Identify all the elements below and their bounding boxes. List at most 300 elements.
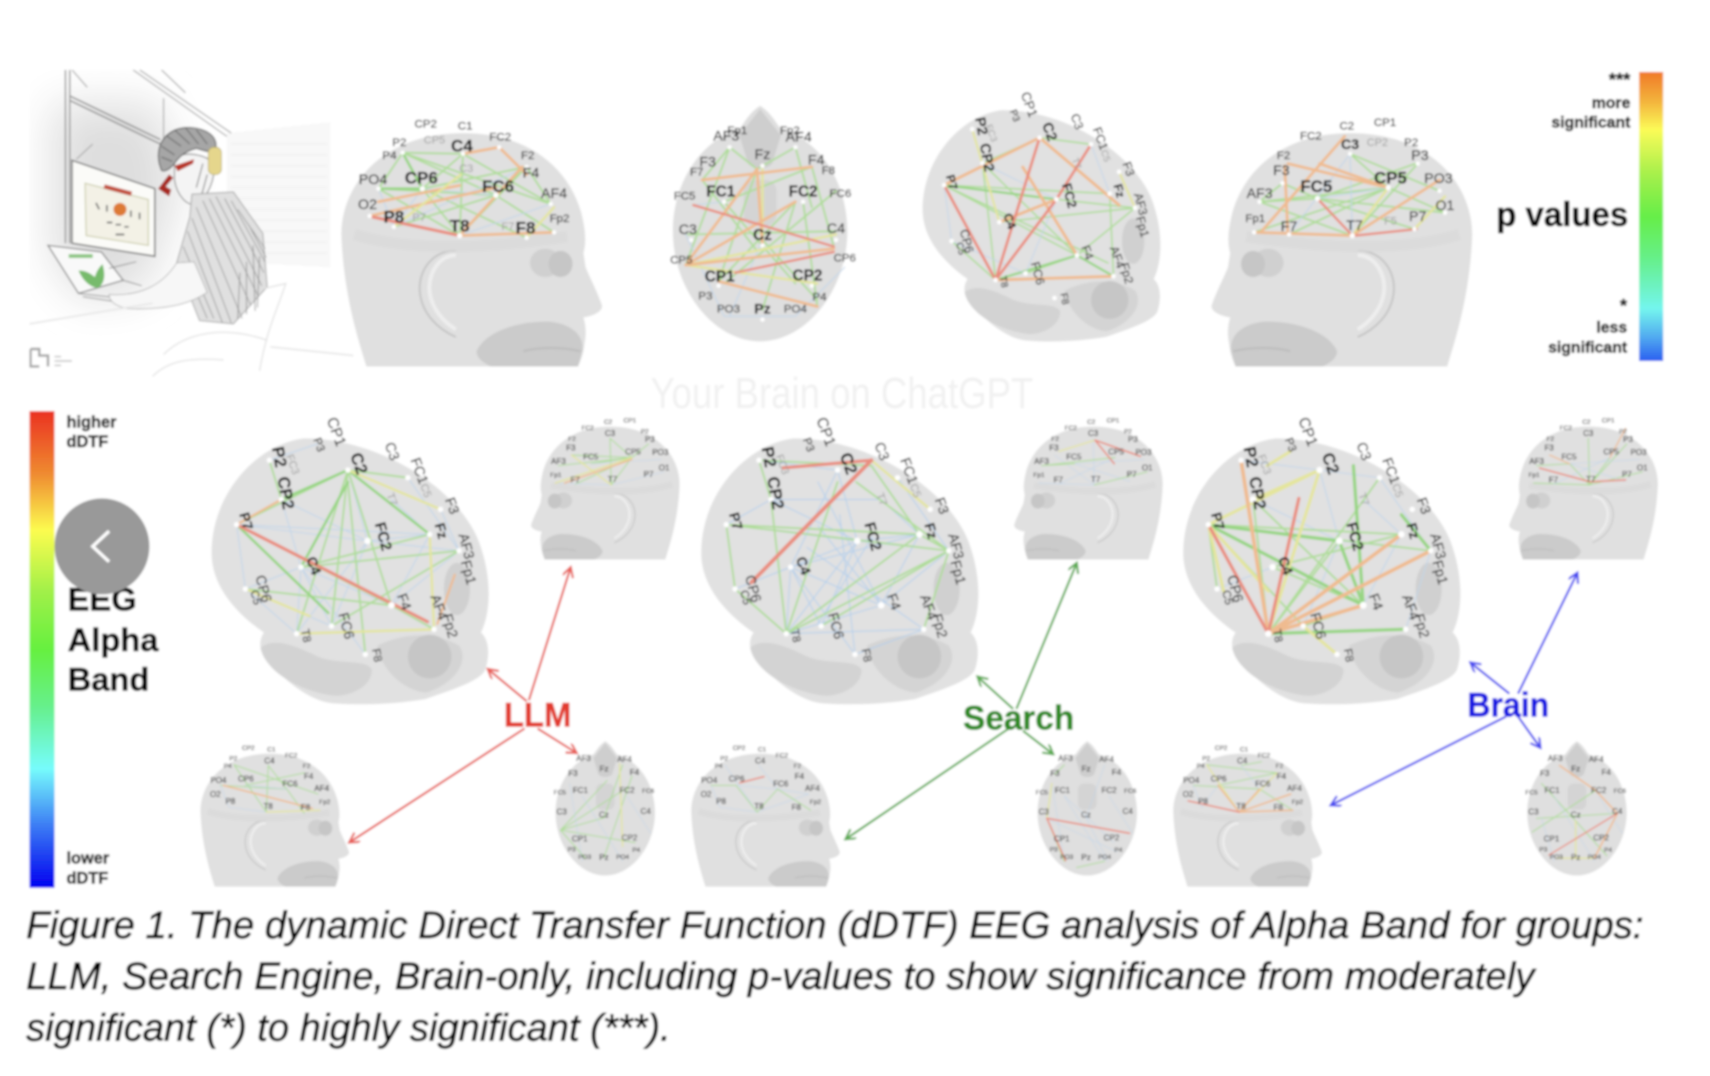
electrode labels: FC6 — [335, 611, 357, 641]
electrode labels: CP5 — [1108, 447, 1124, 456]
electrode labels — [1245, 117, 1455, 235]
p values legend: *** — [1609, 69, 1631, 90]
Search group: small side view left — [1014, 417, 1163, 560]
electrode labels: FC2 — [581, 425, 594, 432]
electrode labels: F3 — [1049, 444, 1059, 453]
Brain group: small side view left — [1509, 417, 1658, 560]
electrode labels: C5 — [953, 241, 967, 257]
electrode labels: CP5 — [670, 255, 692, 267]
electrode labels: FC6 — [1255, 780, 1271, 789]
electrode labels: FC1 — [1055, 786, 1071, 795]
electrode labels: T8 — [1270, 628, 1284, 643]
electrode labels: AF3 — [1058, 754, 1073, 763]
figure caption: Figure 1. The dynamic Direct Transfer Function (dDTF) EEG analysis of Alpha Band for groups: — [26, 904, 1643, 947]
electrode labels: F4 — [630, 768, 640, 777]
electrode labels: T8 — [450, 216, 470, 235]
Search group: small side view right — [691, 745, 840, 887]
figure caption: significant (*) to highly significant (***). — [26, 1006, 671, 1049]
electrode labels: F2 — [1276, 763, 1284, 770]
dDTF legend colour bar: Band — [68, 660, 149, 697]
electrode labels: CP1 — [812, 415, 839, 449]
electrode labels: PO3 — [1424, 171, 1453, 187]
node dots — [942, 127, 1137, 300]
electrode labels: Fz — [431, 521, 450, 541]
electrode labels: FC2 — [1101, 786, 1117, 795]
electrode labels: CP6 — [741, 574, 764, 604]
node dots — [1252, 152, 1447, 238]
electrode labels: F2 — [794, 763, 802, 770]
electrode labels: C4 — [451, 137, 473, 156]
electrode labels: CP1 — [1544, 834, 1560, 843]
electrode labels: FC5 — [1525, 789, 1538, 796]
electrode labels: AF3 — [551, 457, 566, 466]
electrode labels: C1 — [758, 746, 767, 753]
electrode labels: C2 — [1087, 419, 1096, 426]
electrode labels: CP2 — [976, 142, 997, 173]
electrode labels: Fz — [1571, 765, 1580, 774]
electrode labels: FC2 — [489, 131, 511, 143]
electrode labels: PO3 — [578, 854, 592, 861]
watermark title: Your Brain on ChatGPT — [651, 370, 1033, 418]
electrode labels: FC6 — [1028, 260, 1047, 287]
electrode labels: F2 — [1051, 436, 1059, 443]
electrode labels: C5 — [1389, 482, 1405, 499]
electrode labels: PO4 — [359, 172, 387, 188]
electrode labels: C4 — [640, 807, 651, 816]
electrode labels: FC1 — [1090, 125, 1111, 152]
electrode labels: Fz — [1403, 521, 1422, 541]
Brain group: small side view right — [1173, 745, 1322, 887]
electrode labels: T8 — [298, 628, 312, 643]
electrode labels: Pz — [1571, 853, 1580, 862]
p values legend: significant — [1548, 339, 1628, 356]
electrode labels: T8 — [263, 802, 273, 811]
electrode labels: CP2 — [733, 745, 746, 752]
electrode labels — [235, 415, 479, 663]
LLM group: large tilted brain map — [212, 415, 489, 704]
electrode labels: C3 — [1341, 137, 1359, 153]
electrode labels — [725, 415, 968, 663]
electrode labels: P8 — [383, 208, 404, 227]
electrode labels: F2 — [1277, 150, 1290, 162]
electrode labels: CP2 — [1104, 834, 1120, 843]
electrode labels: PO4 — [1183, 776, 1200, 785]
electrode labels: P7 — [725, 511, 745, 532]
electrode labels: FC6 — [824, 611, 847, 641]
electrode labels: C2 — [346, 450, 371, 477]
Brain group: small top view — [1525, 741, 1627, 876]
electrode labels: O2 — [210, 790, 221, 799]
electrode labels: AF3 — [713, 128, 739, 144]
electrode labels: F8 — [516, 218, 535, 237]
electrode labels: P7 — [1127, 470, 1137, 479]
electrode labels: Fp2 — [810, 799, 822, 806]
electrode labels: P3 — [568, 847, 576, 854]
electrode labels: F3 — [1273, 163, 1290, 179]
electrode labels: Fp1 — [1529, 472, 1540, 479]
electrode labels — [670, 125, 856, 318]
electrode labels: CP6 — [1223, 574, 1246, 604]
electrode labels: P8 — [225, 797, 236, 806]
electrode labels: Fz — [1082, 765, 1091, 774]
electrode labels: CP6 — [729, 775, 745, 784]
electrode labels: AF3 — [455, 532, 477, 561]
electrode labels: P3 — [1411, 148, 1429, 164]
electrode labels: CP2 — [1215, 745, 1228, 752]
electrode labels: Fp1 — [457, 559, 479, 587]
electrode labels: F7 — [1281, 219, 1297, 235]
electrode labels: FC2 — [1560, 425, 1572, 432]
electrode labels: CP6 — [1211, 775, 1227, 784]
dDTF legend colour bar: dDTF — [67, 869, 108, 887]
electrode labels — [701, 745, 822, 812]
electrode labels: O1 — [659, 464, 670, 473]
electrode labels: P3 — [310, 436, 326, 454]
electrode labels: AF4 — [426, 593, 450, 623]
electrode labels: F7 — [502, 221, 514, 233]
electrode labels: F8 — [1341, 648, 1355, 663]
electrode labels — [554, 754, 655, 862]
electrode labels: C5 — [248, 589, 263, 606]
electrode labels: FC5 — [1066, 452, 1082, 461]
electrode labels: F3 — [1120, 160, 1137, 178]
electrode labels: P4 — [1197, 763, 1205, 770]
electrode labels: C5 — [1219, 589, 1235, 606]
electrode labels: Pz — [1081, 853, 1091, 862]
dDTF legend colour bar: lower — [67, 850, 110, 868]
electrode labels: F8 — [1274, 803, 1284, 812]
electrode labels: C4 — [792, 555, 813, 577]
electrode labels: F3 — [931, 496, 952, 517]
electrode labels: FC1 — [1378, 456, 1403, 487]
electrode labels: Fz — [755, 147, 770, 163]
electrode labels: FC2 — [1343, 520, 1366, 553]
electrode labels: C5 — [417, 482, 433, 499]
electrode labels: F4 — [1601, 768, 1611, 777]
electrode labels: C3 — [1068, 112, 1086, 132]
carousel previous button — [55, 498, 149, 594]
electrode labels: F2 — [521, 150, 534, 162]
electrode labels: C4 — [1274, 555, 1295, 577]
LLM group: small side view right — [200, 745, 349, 887]
LLM arrows — [350, 568, 576, 842]
dDTF legend colour bar: higher — [67, 414, 117, 432]
brain map: side view left, top row — [1212, 117, 1472, 366]
electrode labels: Fp1 — [727, 125, 747, 137]
electrode labels: F2 — [568, 436, 576, 443]
electrode labels: CP5 — [1603, 447, 1620, 456]
dDTF legend colour bar: EEG — [68, 581, 137, 618]
icon: monitor — [72, 160, 155, 256]
electrode labels: F3 — [1050, 769, 1060, 778]
electrode labels: F7 — [1054, 475, 1064, 484]
electrode labels — [943, 90, 1152, 306]
Brain label: Brain — [1467, 687, 1549, 725]
electrode labels: P7 — [644, 470, 654, 479]
electrode labels: CP2 — [793, 267, 822, 284]
electrode labels: P3 — [1050, 847, 1058, 854]
p values legend: significant — [1551, 115, 1631, 132]
p values legend: less — [1596, 320, 1627, 337]
electrode labels: P7 — [235, 511, 255, 532]
electrode labels: P8 — [1198, 797, 1209, 806]
electrode labels: Fz — [920, 521, 940, 541]
electrode labels: AF4 — [1589, 755, 1604, 764]
electrode labels: CP1 — [1295, 415, 1321, 449]
electrode labels: PO3 — [652, 448, 669, 457]
Search arrows — [846, 564, 1076, 839]
Search group: large tilted brain map — [701, 415, 978, 704]
electrode labels: CP6 — [405, 168, 438, 187]
electrode labels: P2 — [268, 445, 290, 469]
electrode labels: P2 — [392, 137, 406, 149]
electrode labels: P3 — [1623, 435, 1633, 444]
electrode labels: AF3 — [1426, 532, 1448, 561]
electrode labels: FC6 — [830, 188, 851, 200]
electrode labels: Cz — [599, 811, 609, 820]
electrode labels: O1 — [1637, 464, 1648, 473]
electrode labels: FC3 — [283, 453, 301, 476]
electrode labels: CP1 — [1107, 417, 1120, 424]
electrode labels: P3 — [698, 291, 712, 303]
electrode labels: P7 — [1409, 209, 1427, 225]
electrode labels: FC6 — [282, 780, 298, 789]
electrode labels: T7 — [1346, 218, 1363, 234]
electrode labels — [1207, 415, 1450, 663]
electrode labels: AF4 — [1099, 755, 1114, 764]
electrode labels: FC6 — [482, 177, 514, 196]
electrode labels: PO4 — [784, 304, 808, 316]
electrode labels: AF4 — [1107, 244, 1128, 270]
electrode labels: C3 — [459, 163, 473, 175]
electrode labels: F3 — [441, 496, 462, 517]
electrode labels: FC6 — [1124, 788, 1137, 795]
electrode labels: FC6 — [1306, 611, 1329, 641]
Search group: small top view — [1036, 741, 1137, 876]
electrode labels: CP6 — [957, 228, 976, 255]
electrode labels: AF4 — [805, 784, 820, 793]
electrode labels: AF4 — [541, 186, 567, 202]
figure caption: LLM, Search Engine, Brain-only, including p-values to show significance from moderately — [26, 955, 1536, 998]
electrode labels: Cz — [1571, 811, 1581, 820]
electrode labels: C2 — [1582, 419, 1591, 426]
electrode labels: F4 — [523, 165, 539, 181]
electrode labels: CP5 — [625, 447, 641, 456]
electrode labels: Fp1 — [1245, 213, 1265, 225]
electrode labels: PO3 — [1060, 854, 1074, 861]
electrode labels: CP5 — [424, 135, 445, 147]
electrode labels: F8 — [859, 648, 873, 663]
electrode labels: P2 — [229, 756, 238, 763]
person figure sketch — [29, 128, 353, 376]
electrode labels: C4 — [1123, 807, 1133, 816]
electrode labels: FC2 — [1258, 753, 1271, 760]
electrode labels: AF3 — [1131, 191, 1150, 217]
electrode labels: FC1 — [896, 456, 921, 487]
electrode labels: Fp2 — [1410, 612, 1432, 640]
electrode labels: Fp1 — [550, 472, 562, 479]
Brain group: large tilted brain map — [1183, 415, 1460, 704]
electrode labels: C3 — [679, 222, 697, 238]
electrode labels: CP1 — [323, 415, 349, 449]
electrode labels: PO3 — [717, 304, 740, 316]
electrode labels: C4 — [827, 221, 845, 237]
electrode labels: T7 — [1091, 475, 1101, 484]
electrode labels: AF4 — [617, 755, 632, 764]
electrode labels: FC1 — [573, 786, 589, 795]
electrode labels: Fp2 — [550, 213, 569, 225]
electrode labels: P3 — [1007, 108, 1022, 124]
electrode labels: F3 — [1413, 496, 1434, 517]
electrode labels: AF3 — [944, 532, 966, 561]
LLM group: small top view — [554, 741, 655, 876]
electrode labels: FC2 — [1591, 786, 1607, 795]
node dots — [234, 458, 462, 657]
electrode labels: CP2 — [763, 475, 788, 511]
electrode labels: Fp2 — [438, 612, 460, 640]
electrode labels: AF4 — [1398, 593, 1422, 623]
electrode labels: AF3 — [1529, 457, 1545, 466]
electrode labels: Fp1 — [1429, 559, 1450, 587]
electrode labels: PO3 — [1631, 448, 1647, 457]
electrode labels: C4 — [1000, 211, 1019, 231]
brain map: top view, top row — [670, 106, 856, 341]
p values legend — [1496, 69, 1663, 361]
electrode labels: FC2 — [371, 520, 395, 553]
electrode labels: C3 — [1583, 429, 1594, 438]
electrode labels: CP6 — [252, 574, 274, 604]
electrode labels: P2 — [720, 756, 729, 763]
electrode labels: FC6 — [773, 780, 789, 789]
electrode labels: C2 — [604, 419, 613, 426]
electrode labels: PO4 — [1098, 854, 1112, 861]
electrode labels: C4 — [264, 757, 275, 766]
node dots — [1206, 458, 1434, 657]
electrode labels: AF3 — [576, 754, 591, 763]
electrode labels: P4 — [715, 763, 723, 770]
electrode labels: T7 — [608, 475, 618, 484]
electrode labels: Fp1 — [1033, 472, 1045, 479]
electrode labels: O2 — [701, 790, 712, 799]
electrode labels: FC2 — [789, 183, 818, 200]
electrode labels: CP2 — [414, 118, 437, 130]
electrode labels: F3 — [568, 769, 578, 778]
electrode labels: F4 — [304, 772, 314, 781]
electrode labels: P3 — [1128, 435, 1138, 444]
electrode labels: O1 — [1436, 198, 1455, 214]
electrode labels: AF4 — [916, 593, 940, 623]
electrode labels: F4 — [393, 592, 414, 613]
icon: laptop with leaf logo — [48, 245, 142, 304]
electrode labels: CP2 — [274, 475, 298, 511]
electrode labels: P7 — [412, 212, 426, 224]
electrode labels: C3 — [1039, 808, 1049, 817]
electrode labels: CP1 — [1374, 117, 1396, 129]
electrode labels: Pz — [599, 853, 609, 862]
electrode labels: PO4 — [1588, 854, 1601, 861]
electrode labels: C3 — [1353, 440, 1374, 463]
node dots — [689, 145, 838, 322]
electrode labels: F7 — [570, 475, 580, 484]
electrode labels: O2 — [358, 197, 377, 213]
electrode labels: FC3 — [984, 123, 1000, 143]
electrode labels: C4 — [302, 555, 324, 577]
electrode labels: C3 — [1528, 808, 1539, 817]
electrode labels: Cz — [753, 227, 772, 244]
electrode labels: T8 — [997, 275, 1010, 289]
electrode labels: AF4 — [314, 784, 330, 793]
electrode labels: F2 — [303, 763, 311, 770]
brain map: tilted view, top row — [923, 90, 1160, 341]
electrode labels: Fp2 — [1292, 799, 1304, 806]
electrode labels: T7 — [384, 491, 399, 508]
electrode labels: C5 — [737, 589, 753, 606]
electrode labels: CP1 — [624, 417, 637, 424]
electrode labels: T7 — [1070, 156, 1084, 170]
electrode labels: FC5 — [1036, 789, 1048, 796]
electrode labels: F4 — [1078, 243, 1096, 262]
electrode labels: F4 — [808, 152, 825, 168]
electrode labels: F8 — [1058, 292, 1070, 306]
electrode labels: P4 — [632, 847, 641, 854]
electrode labels: C3 — [381, 440, 402, 463]
electrode labels: F2 — [1547, 436, 1555, 443]
electrode labels: F4 — [795, 772, 805, 781]
electrode labels: CP1 — [1054, 834, 1070, 843]
electrode labels: FC2 — [861, 520, 884, 553]
electrode labels: FC3 — [1255, 453, 1273, 476]
electrode labels: P3 — [1539, 847, 1548, 854]
electrode labels: CP2 — [1245, 475, 1270, 511]
electrode labels: C3 — [557, 808, 567, 817]
electrode labels: C1 — [267, 746, 276, 753]
electrode labels: F4 — [1112, 768, 1122, 777]
electrode labels: C2 — [836, 450, 861, 477]
LLM group: small side view left — [531, 417, 680, 560]
electrode labels: C3 — [871, 440, 892, 463]
electrode labels: CP2 — [1593, 834, 1610, 843]
illustration: student wearing EEG headset at computer — [29, 70, 353, 376]
electrode labels: CP6 — [238, 775, 254, 784]
electrode labels: C2 — [1340, 121, 1354, 133]
electrode labels: Fp2 — [928, 612, 950, 640]
electrode labels: P2 — [1404, 137, 1418, 149]
electrode labels: Fp2 — [319, 799, 331, 806]
electrode labels: AF3 — [1548, 754, 1563, 763]
electrode labels: P8 — [716, 797, 726, 806]
electrode labels: FC1 — [407, 456, 431, 487]
electrode labels: CP1 — [1018, 90, 1041, 119]
electrode labels: CP6 — [834, 253, 856, 264]
Brain arrows — [1332, 574, 1577, 805]
electrode labels: C1 — [458, 121, 473, 133]
electrode labels: F4 — [1277, 772, 1287, 781]
electrode labels: C2 — [1318, 450, 1343, 477]
electrode labels: FC5 — [1561, 452, 1577, 461]
electrode labels: FC6 — [1614, 788, 1626, 795]
p values legend: p values — [1496, 196, 1628, 234]
electrode labels — [1036, 754, 1137, 862]
electrode labels: Fp1 — [947, 559, 968, 587]
electrode labels: C2 — [1038, 120, 1060, 144]
electrode labels: Pz — [754, 302, 771, 318]
electrode labels: CP1 — [705, 269, 735, 286]
electrode labels: F3 — [1540, 769, 1550, 778]
electrode labels: F8 — [301, 803, 311, 812]
electrode labels: PO4 — [210, 776, 227, 785]
electrode labels: F8 — [792, 803, 801, 812]
electrode labels: FC6 — [642, 788, 655, 795]
